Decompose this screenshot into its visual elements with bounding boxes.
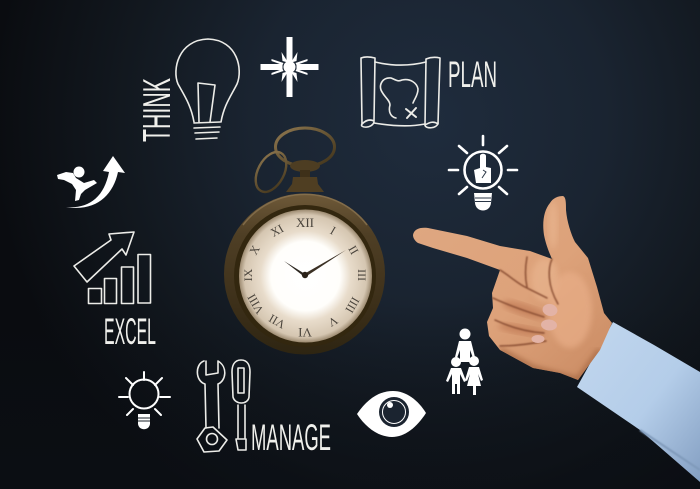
text: MANAGE [251,417,331,458]
roman numerals: XII [296,215,314,230]
bulb outline [176,39,239,139]
label: PLAN: PLAN [448,54,497,95]
roman numerals: IX [241,268,255,281]
watch rings [249,128,334,197]
icon: family [446,328,483,395]
icon: small light bulb [119,372,170,429]
icon: light bulb with THINK label [136,39,239,142]
icon: screwdriver [232,360,250,450]
icon: growth bar chart with arrow [74,232,150,304]
label: THINK: THINK [136,78,179,142]
roman numerals: I [328,223,338,238]
roman numerals: II [345,243,362,257]
text: EXCEL [104,311,156,352]
icon: eye [357,391,426,437]
pocket watch [224,128,385,354]
shirt sleeve [577,322,700,482]
roman numerals: VI [298,325,312,340]
finger creases [493,257,558,346]
hand shading [497,201,600,380]
watch face [239,210,372,342]
icon: treasure map [361,57,440,128]
icon: light bulb with finger [449,136,517,210]
icon: wrench [197,361,227,452]
pointing hand [413,196,612,380]
roman numerals: V [325,313,340,330]
roman numerals: VII [266,311,288,332]
roman numerals [241,215,369,340]
watch case [224,194,385,354]
roman numerals: X [246,242,263,257]
x mark [406,108,416,118]
map route [380,78,418,118]
roman numerals: IIII [342,295,363,315]
watch crown [286,160,324,192]
roman numerals: XI [268,221,286,240]
clock hands [284,250,346,278]
fingernails [532,303,559,343]
icon: people converging on a centre [260,37,318,97]
roman numerals: VIII [244,292,267,316]
roman numerals: III [355,269,369,281]
icon: runner with rising arrow [57,156,125,208]
